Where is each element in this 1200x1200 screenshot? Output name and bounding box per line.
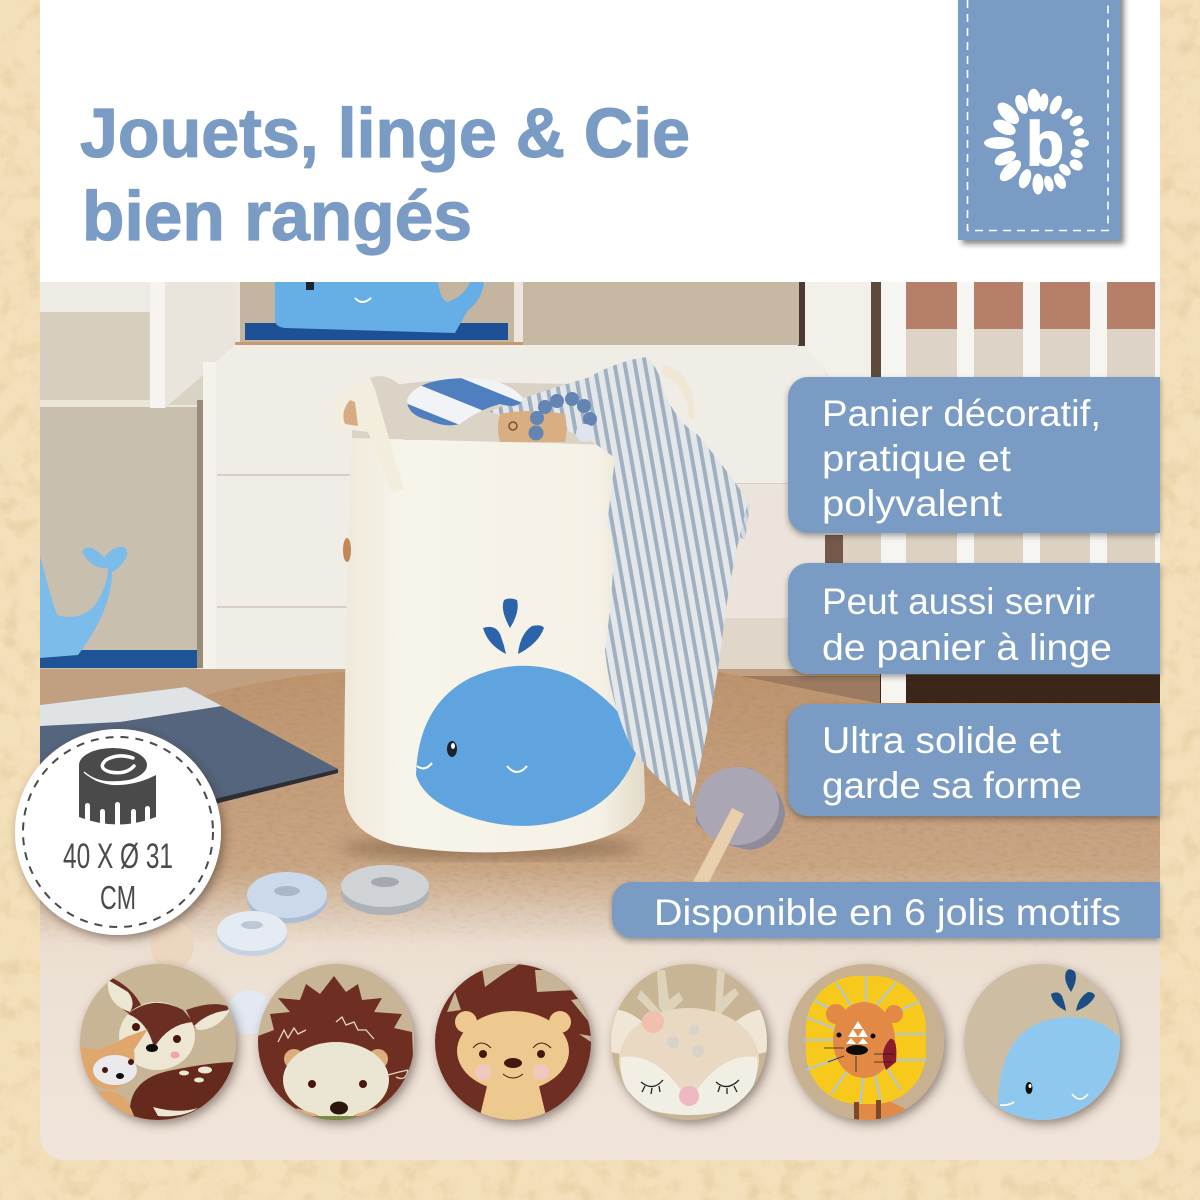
size badge xyxy=(15,729,221,935)
callout: laundry basket xyxy=(788,563,1160,674)
rug texture xyxy=(44,700,1158,930)
callout: decorative basket: polyvalent xyxy=(822,483,1003,524)
basket shadow xyxy=(340,836,640,860)
motif: lion xyxy=(786,962,946,1122)
callout: sturdy xyxy=(788,704,1160,816)
towel lining xyxy=(740,503,750,540)
motif: whale xyxy=(962,962,1122,1122)
whale xyxy=(416,666,640,826)
callout: laundry basket: Peut aussi servir xyxy=(822,581,1095,622)
icon: tape measure roll xyxy=(79,748,156,833)
spout xyxy=(483,598,544,654)
title: Jouets, linge & Cie xyxy=(80,94,690,172)
dimensions text: 40 X Ø 31 xyxy=(63,837,173,876)
callout: six motifs xyxy=(612,882,1160,938)
wooden toy xyxy=(693,767,785,884)
brand tag with logo xyxy=(958,0,1120,240)
brand tag with logo: b xyxy=(1026,110,1064,179)
motif: bear hedgehog xyxy=(433,962,593,1122)
rug xyxy=(40,672,1160,1160)
room wall and cabinet xyxy=(170,282,871,669)
callout: decorative basket: pratique et xyxy=(822,438,1012,479)
crib xyxy=(843,282,1160,703)
callout: sturdy: Ultra solide et xyxy=(822,720,1062,761)
title: bien rangés xyxy=(82,177,472,255)
motif: deer and fawn xyxy=(78,962,238,1122)
canvas body xyxy=(344,438,645,852)
dimensions text: CM xyxy=(100,879,136,916)
left handle xyxy=(352,390,404,492)
photo scene xyxy=(40,282,1160,1160)
callout: decorative basket: Panier décoratif, xyxy=(822,393,1101,434)
striped towel xyxy=(489,357,748,806)
magazine xyxy=(40,687,338,804)
callout: six motifs: Disponible en 6 jolis motifs xyxy=(654,892,1121,933)
upper storage boxes xyxy=(240,282,799,345)
callout: laundry basket: de panier à linge xyxy=(822,627,1112,668)
title xyxy=(80,94,690,255)
left shelf and whale box xyxy=(40,282,235,670)
motif: hedgehog xyxy=(256,962,416,1122)
rim interior xyxy=(352,381,596,444)
fabric basket xyxy=(330,357,750,852)
floor xyxy=(40,669,880,705)
callout: decorative basket xyxy=(788,377,1160,533)
callout: sturdy: garde sa forme xyxy=(822,765,1082,806)
toy rings xyxy=(150,865,429,1034)
right handle xyxy=(662,365,695,420)
header panel xyxy=(40,0,1160,282)
motif: fawn face xyxy=(609,962,769,1122)
dimensions text xyxy=(63,837,173,916)
bag contents xyxy=(370,376,597,442)
